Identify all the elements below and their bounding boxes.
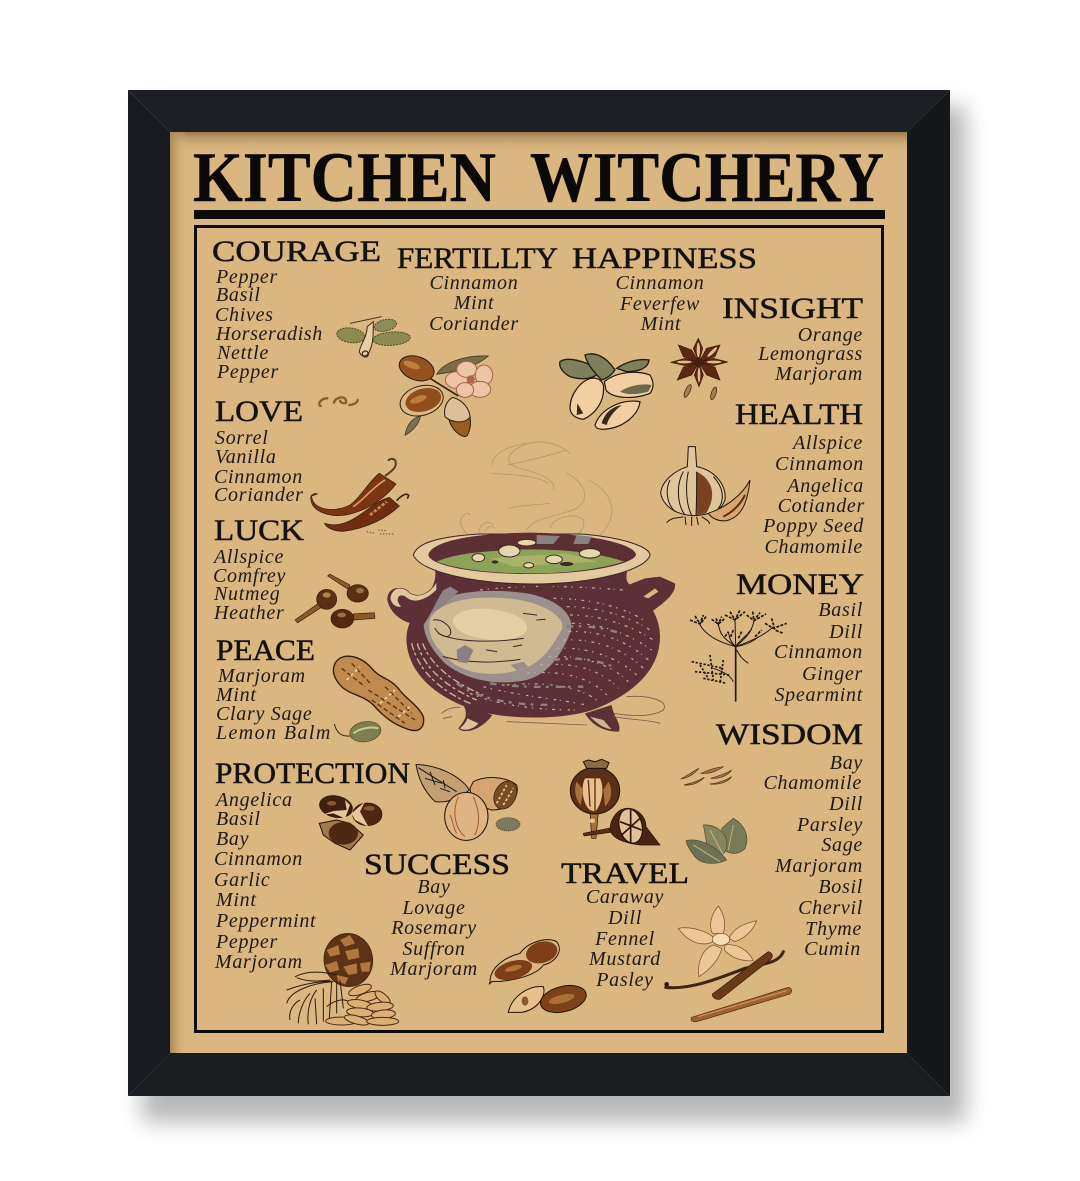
panel: wisdom: Thyme [805,918,862,940]
potion [437,549,624,573]
panel: wisdom: Bosil [818,876,863,898]
highlight [451,605,529,643]
panel: wisdom: Cumin [804,938,861,960]
panel: luck: Heather [213,602,284,624]
panel: protection: Peppermint [215,910,316,932]
grey blotches [457,645,473,663]
panel: health: Angelica [785,475,864,497]
panel: travel: Pasley [595,969,654,991]
panel: love: Coriander [214,484,304,506]
panel: courage [212,235,381,383]
panel: money: Ginger [802,663,863,685]
icon: pistachios [560,354,653,429]
panel: luck: LUCK [214,514,304,547]
body [406,567,660,718]
body flecks [470,586,653,710]
panel: insight [722,292,863,385]
panel: peace [215,634,331,744]
icon: squiggle seeds [319,397,358,406]
icon: beans [489,938,589,1017]
steam [460,442,612,545]
panel: happiness: HAPPINESS [572,242,757,275]
panel: money: Basil [818,599,863,621]
panel: peace: Mint [215,684,257,706]
panel: happiness: Mint [640,313,681,335]
panel: love: Cinnamon [214,466,303,488]
panel: travel: Mustard [588,948,661,970]
leaf [437,356,488,374]
panel: insight: Marjoram [774,363,863,385]
panel: peace: Marjoram [217,665,306,687]
panel: money: MONEY [736,568,864,601]
panel: luck: Allspice [212,546,284,568]
icon: star anise [671,338,728,400]
panel: success: Lovage [401,897,466,919]
panel: peace: Lemon Balm [215,722,331,744]
panel: insight: Lemongrass [757,343,863,365]
panel: happiness [572,242,757,335]
panel: wisdom: Bay [830,752,863,774]
panel: wisdom: Marjoram [774,855,863,877]
panel: money [736,568,864,706]
right handle [628,577,675,612]
icon: dill plant [690,610,787,702]
panel: courage: Basil [216,284,261,306]
panel: fertility: Mint [453,292,494,314]
icon: lemon balm leaf [334,719,382,744]
icon: green leaves [686,818,747,863]
right foot [585,705,620,732]
picture frame [128,90,950,1096]
nut [396,351,438,385]
panel: love: LOVE [215,395,303,428]
left side pale hatching [412,643,483,704]
potion lumps [472,539,601,568]
panel: travel: Caraway [586,886,664,908]
left foot [458,705,492,731]
panel: courage: COURAGE [212,235,381,268]
panel: protection: Cinnamon [214,848,303,870]
title: WITCHERY [530,139,884,217]
panel: courage: Nettle [216,342,269,364]
panel: wisdom: Chervil [798,897,863,919]
panel: success [364,848,510,980]
acorn [448,417,470,437]
panel: success: Marjoram [389,958,478,980]
title [193,139,884,217]
panel: protection: Angelica [214,789,293,811]
icon: pinecone with needles and seeds [287,930,399,1027]
panel: wisdom [716,718,863,960]
panel: protection: Marjoram [214,951,303,973]
panel: health [735,398,865,558]
panel: courage: Horseradish [215,323,323,345]
panel: wisdom: Chamomile [763,772,862,794]
flower [445,361,493,397]
icon: cauldron [387,442,675,732]
panel: peace: PEACE [216,634,315,667]
panel: protection [214,757,410,973]
panel: courage: Chives [215,304,274,326]
icon: nuts and flower [396,351,493,437]
rim [413,534,650,584]
icon: vanilla flower and cinnamon [664,906,792,1022]
panel: luck: Nutmeg [213,583,280,605]
panel: success: Bay [417,876,451,898]
content border [196,226,882,1032]
panel: money: Dill [828,621,863,643]
panel: health: Chamomile [764,536,863,558]
panel: protection: Basil [216,808,261,830]
icon: caraway seeds [681,767,732,785]
panel: love [214,395,304,506]
panel: protection: Garlic [214,869,270,891]
panel: wisdom: Sage [821,834,863,856]
panel: fertility [397,242,558,335]
panel: money: Cinnamon [774,641,863,663]
panel: success: SUCCESS [364,848,510,881]
title: KITCHEN [193,139,496,217]
panel: protection: Bay [216,828,249,850]
panel: health: Allspice [791,432,863,454]
icon: poppy pod and citrus [570,759,660,846]
panel: money: Spearmint [774,684,863,706]
panel: travel: Fennel [594,928,655,950]
nut in shell [396,381,447,421]
left handle [387,580,443,625]
inner cauldron wall [428,533,636,574]
title rule [194,210,885,219]
panel: love: Vanilla [215,446,277,468]
panel: travel: TRAVEL [561,857,689,890]
panel: wisdom: Parsley [796,814,863,836]
grey reflection [424,591,571,682]
icon: hazelnuts [317,793,382,850]
steam shadow [537,535,592,544]
panel: travel [561,857,689,991]
panel: courage: Pepper [215,266,278,288]
panel: luck: Comfrey [213,565,286,587]
panel: success: Suffron [402,938,466,960]
rim underside hatching [450,574,620,587]
panel: insight: INSIGHT [722,292,863,325]
panel: protection: Pepper [215,931,278,953]
panel: fertility: FERTILLTY [397,242,558,275]
icon: herb sprig [336,317,411,357]
panel: health: HEALTH [735,398,863,431]
panel: insight: Orange [798,324,863,346]
panel: fertility: Coriander [429,313,519,335]
panel: courage: Pepper [216,361,279,383]
panel: peace: Clary Sage [216,703,312,725]
panel: travel: Dill [607,907,642,929]
panel: wisdom: Dill [828,793,863,815]
dark marks on reflection [433,613,545,662]
panel: health: Poppy Seed [762,515,864,537]
panel: happiness: Feverfew [619,293,700,315]
frame shadow [142,106,966,1122]
panel: fertility: Cinnamon [430,272,518,294]
panel: protection: PROTECTION [215,757,410,790]
icon: nutmeg with leaf [416,764,521,840]
panel: wisdom: WISDOM [716,718,863,751]
poster background [170,132,907,1053]
icon: chili peppers [311,459,409,534]
icon: peanut [333,656,424,731]
small leaf [405,416,421,435]
panel: love: Sorrel [215,427,268,449]
icon: cloves [295,574,375,628]
icon: garlic [661,447,750,526]
grey hatching [457,626,620,705]
ground scribbles [442,696,664,725]
panel: luck [212,514,304,624]
panel: success: Rosemary [390,917,477,939]
panel: health: Cinnamon [775,453,864,475]
panel: happiness: Cinnamon [616,272,704,294]
panel: health: Cotiander [778,495,865,517]
pale reflection [429,597,562,674]
panel: protection: Mint [215,889,257,911]
